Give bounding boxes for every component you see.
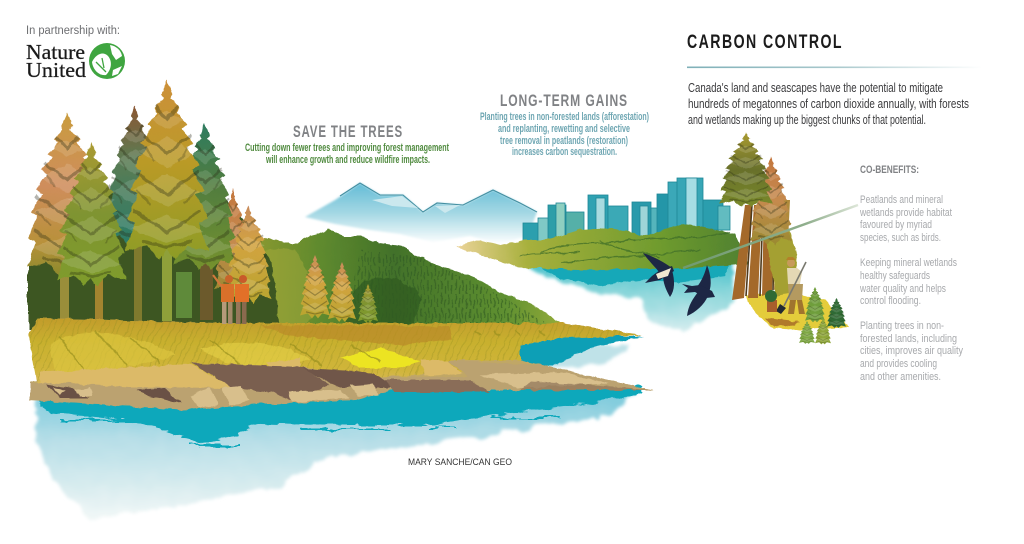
description: [480, 111, 649, 158]
arrow: pointer line from birds to co-benefits: [683, 205, 858, 268]
credit: MARY SANCHE/CAN GEO: [408, 457, 512, 468]
illustration: grassy and rocky shoreline: [28, 318, 653, 410]
illustration: green hills by city: [455, 223, 748, 270]
heading: LONG-TERM GAINS: [500, 92, 628, 110]
illustration: large conifer stand: [26, 80, 272, 304]
hiker left: [213, 275, 234, 324]
benefit: water quality: [859, 257, 957, 307]
benefit: air quality: forested lands, including: [860, 333, 957, 345]
heading: SAVE THE TREES: [293, 123, 403, 141]
description: tree removal in peatlands (restoration): [500, 135, 628, 147]
illustration: right tall trees: [719, 133, 798, 300]
section: Save the Trees: [245, 123, 449, 166]
wordmark: [26, 40, 87, 82]
illustration: forest hillside: [250, 230, 570, 332]
benefit: water quality: Keeping mineral wetlands: [860, 257, 957, 269]
benefit: water quality: water quality and helps: [859, 283, 946, 295]
illustration: pale water wash: [35, 385, 640, 520]
benefit: habitat: favoured by myriad: [860, 219, 932, 231]
rocks: [30, 360, 653, 410]
benefit: air quality: and other amenities.: [860, 371, 941, 383]
section: Long-Term Gains: [480, 92, 649, 158]
benefit: habitat: Peatlands and mineral: [860, 194, 943, 206]
intro paragraph: Canada's land and seascapes have the potential to mitigate: [688, 81, 943, 95]
description: [245, 142, 449, 166]
illustration: lake with wash: [515, 258, 734, 332]
description: Planting trees in non-forested lands (afforestation): [480, 111, 649, 123]
illustration: inlet water: [516, 336, 644, 368]
illustration: planter with shovel: [765, 257, 806, 314]
benefit: habitat: wetlands provide habitat: [859, 207, 952, 219]
partnership label: In partnership with:: [26, 25, 120, 37]
intro paragraph: [688, 81, 969, 127]
main heading: Carbon Control: CARBON CONTROL: [687, 31, 843, 53]
panel: co-benefits: [859, 164, 964, 383]
co-benefits heading: CO-BENEFITS:: [860, 164, 919, 176]
intro paragraph: and wetlands making up the biggest chunks of that potential.: [688, 113, 926, 127]
hiker right: [235, 275, 249, 324]
illustration: small hillside conifers: [300, 255, 378, 323]
logo: In partnership with Nature United: [26, 25, 125, 82]
benefit: air quality: cities, improves air quality: [860, 345, 964, 357]
icon: leaf globe: [89, 43, 125, 79]
benefit: air quality: Planting trees in non-: [860, 320, 944, 332]
illustration: city skyline: [523, 178, 730, 251]
description: Cutting down fewer trees and improving forest management: [245, 142, 449, 154]
benefit: air quality: [860, 320, 964, 383]
benefit: air quality: and provides cooling: [860, 358, 937, 370]
illustration: forest understorey: [28, 170, 280, 330]
icon: swallow left: [643, 253, 674, 297]
illustration: hikers in orange vests: [213, 275, 249, 324]
benefit: water quality: control flooding.: [860, 295, 921, 307]
illustration: mountains: [305, 183, 537, 244]
illustration: small planted trees: [799, 287, 846, 344]
benefit: habitat: species, such as birds.: [860, 232, 941, 244]
benefit: water quality: healthy safeguards: [860, 270, 930, 282]
benefit: habitat: [859, 194, 952, 244]
illustration: right ground and wetland: [745, 292, 848, 330]
description: and replanting, rewetting and selective: [498, 123, 630, 135]
grass: [28, 318, 642, 388]
wordmark: Nature: [26, 40, 85, 64]
description: increases carbon sequestration.: [512, 146, 617, 158]
wordmark: United: [26, 58, 87, 82]
description: will enhance growth and reduce wildfire impacts.: [265, 154, 430, 166]
illustration: teal water: [39, 385, 642, 446]
icon: swallow right: [682, 265, 715, 316]
heading rule: [687, 66, 982, 68]
shore base: [28, 318, 653, 410]
